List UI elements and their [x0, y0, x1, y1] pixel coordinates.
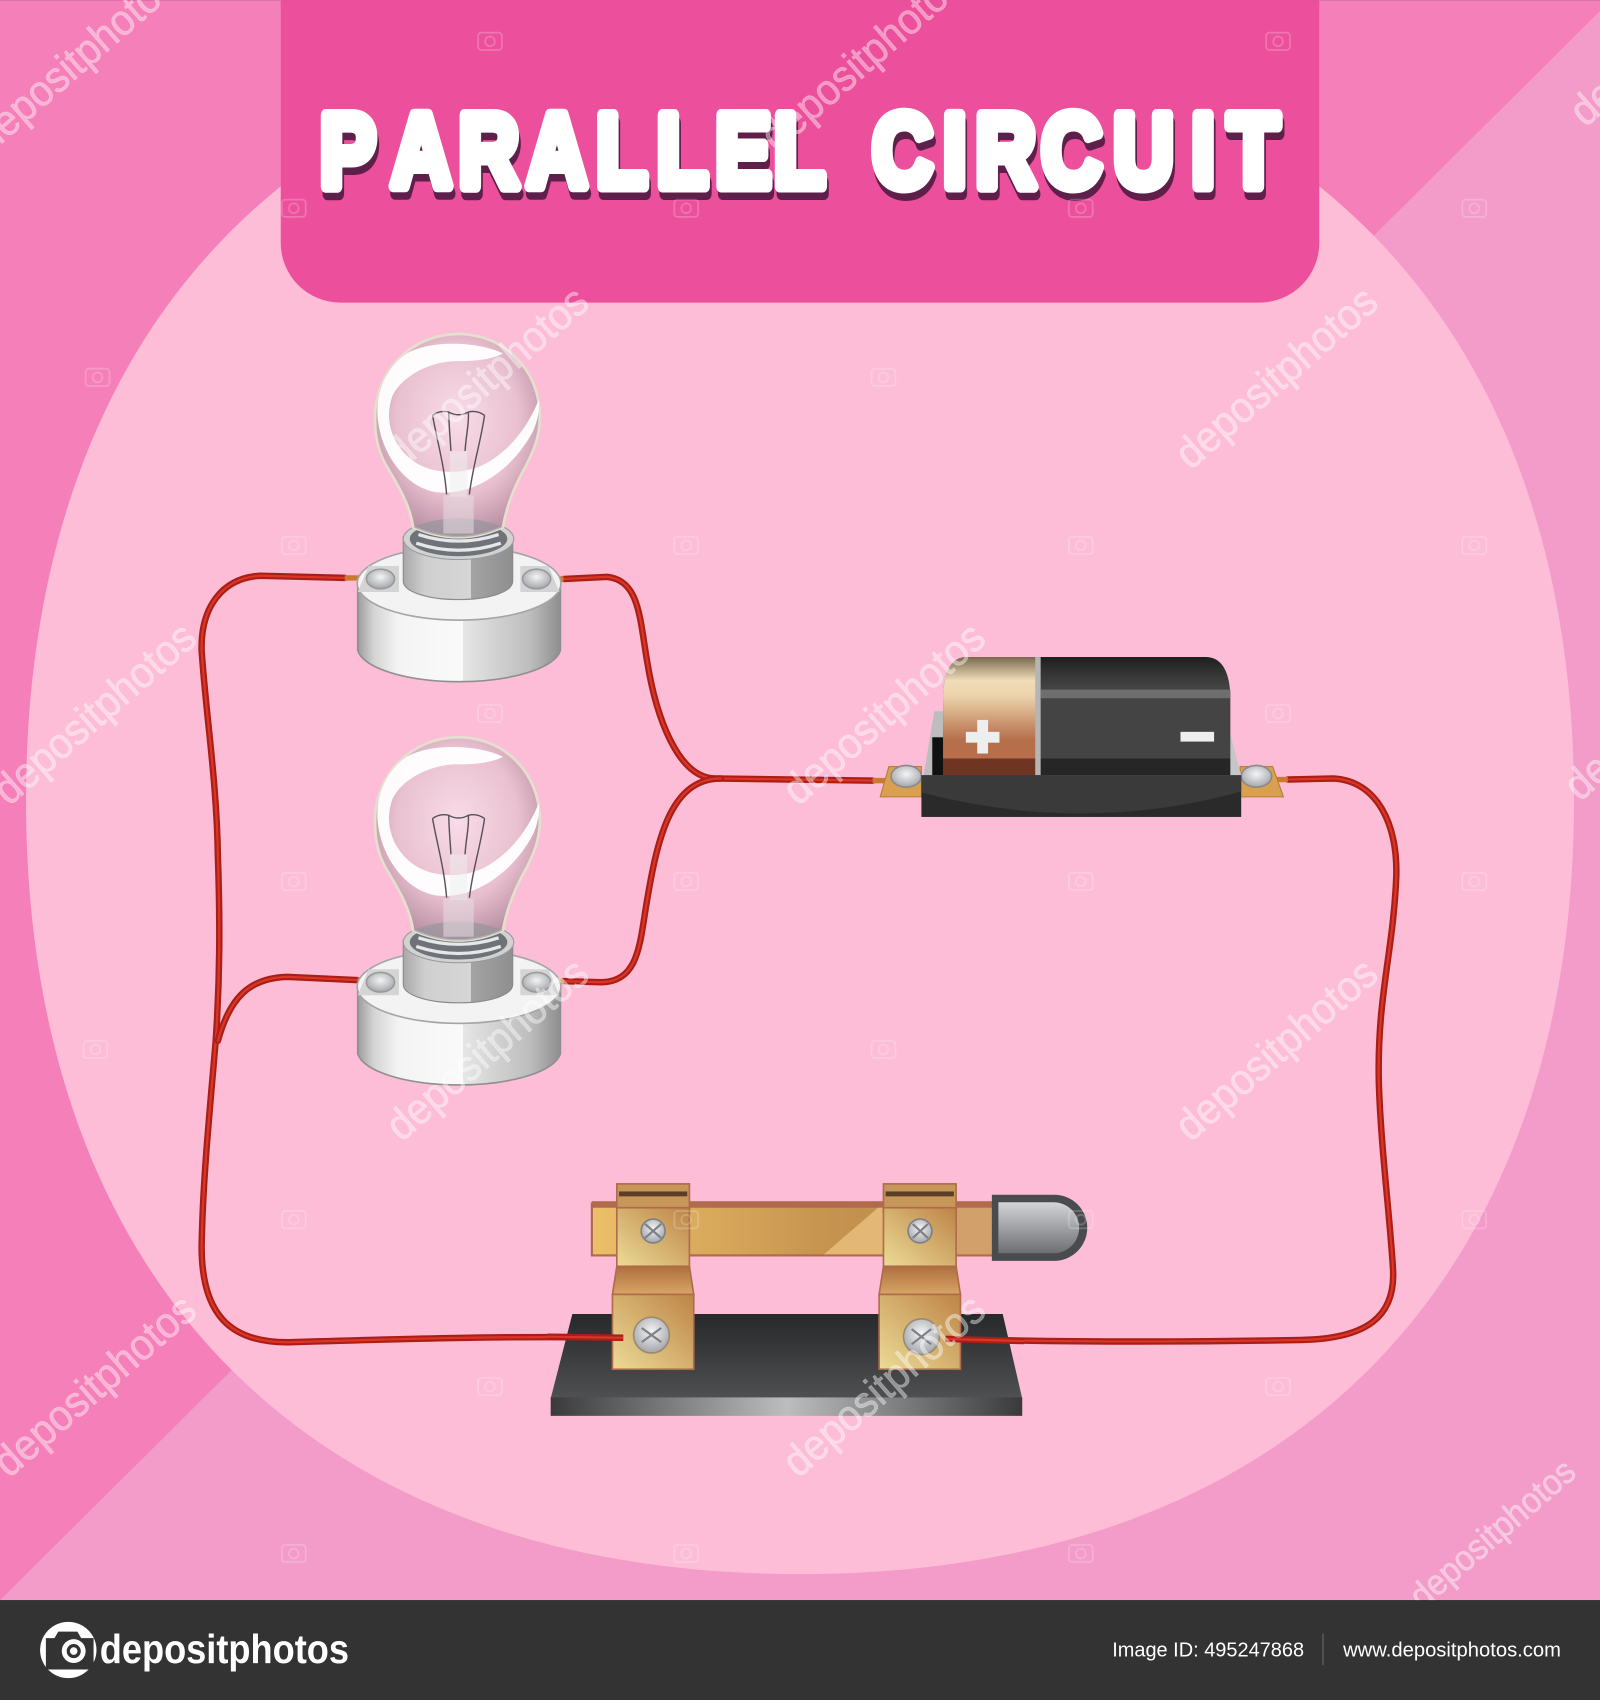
watermark text: depositphotos — [773, 613, 995, 814]
title: PARALLEL CIRCUIT — [320, 93, 1279, 209]
wire: bulb 2 right to junction — [564, 778, 721, 982]
footer bar — [0, 1600, 1600, 1700]
icon: knife switch — [547, 1184, 1087, 1416]
footer brand name: depositphotos — [100, 1626, 349, 1672]
watermark text: depositphotos — [377, 277, 598, 478]
title banner — [281, 0, 1319, 303]
icon: battery — [880, 657, 1283, 817]
switch handle — [992, 1195, 1087, 1261]
watermark text: depositphotos — [377, 949, 598, 1150]
icon: light bulb 1 — [357, 334, 561, 682]
copper wire stubs — [345, 578, 1288, 981]
left bracket — [612, 1184, 694, 1369]
switch base — [551, 1314, 1022, 1416]
wire: bulb 2 left branch — [218, 977, 358, 1041]
wire: battery to switch — [945, 778, 1396, 1341]
wire: bulb 1 right to battery — [564, 577, 873, 781]
watermark text: depositphotos — [1402, 1451, 1583, 1616]
footer logo icon — [40, 1622, 96, 1678]
icon: light bulb 2 — [357, 737, 561, 1085]
wire end at left bracket — [547, 1337, 623, 1338]
right bracket — [879, 1184, 960, 1369]
watermark text: depositphotos — [1166, 277, 1387, 478]
watermark text: depositphotos — [773, 1285, 995, 1486]
footer image id: Image ID: 495247868 — [1112, 1640, 1304, 1662]
footer site url: www.depositphotos.com — [1342, 1640, 1561, 1662]
switch blade — [592, 1201, 993, 1255]
title: PARALLEL CIRCUIT — [322, 100, 1281, 216]
wire: left loop from bulb 1 to switch — [202, 576, 623, 1342]
watermark text: depositphotos — [1166, 949, 1387, 1150]
wire end at right bracket — [945, 1339, 1024, 1341]
watermark camera icons — [83, 33, 1486, 1562]
